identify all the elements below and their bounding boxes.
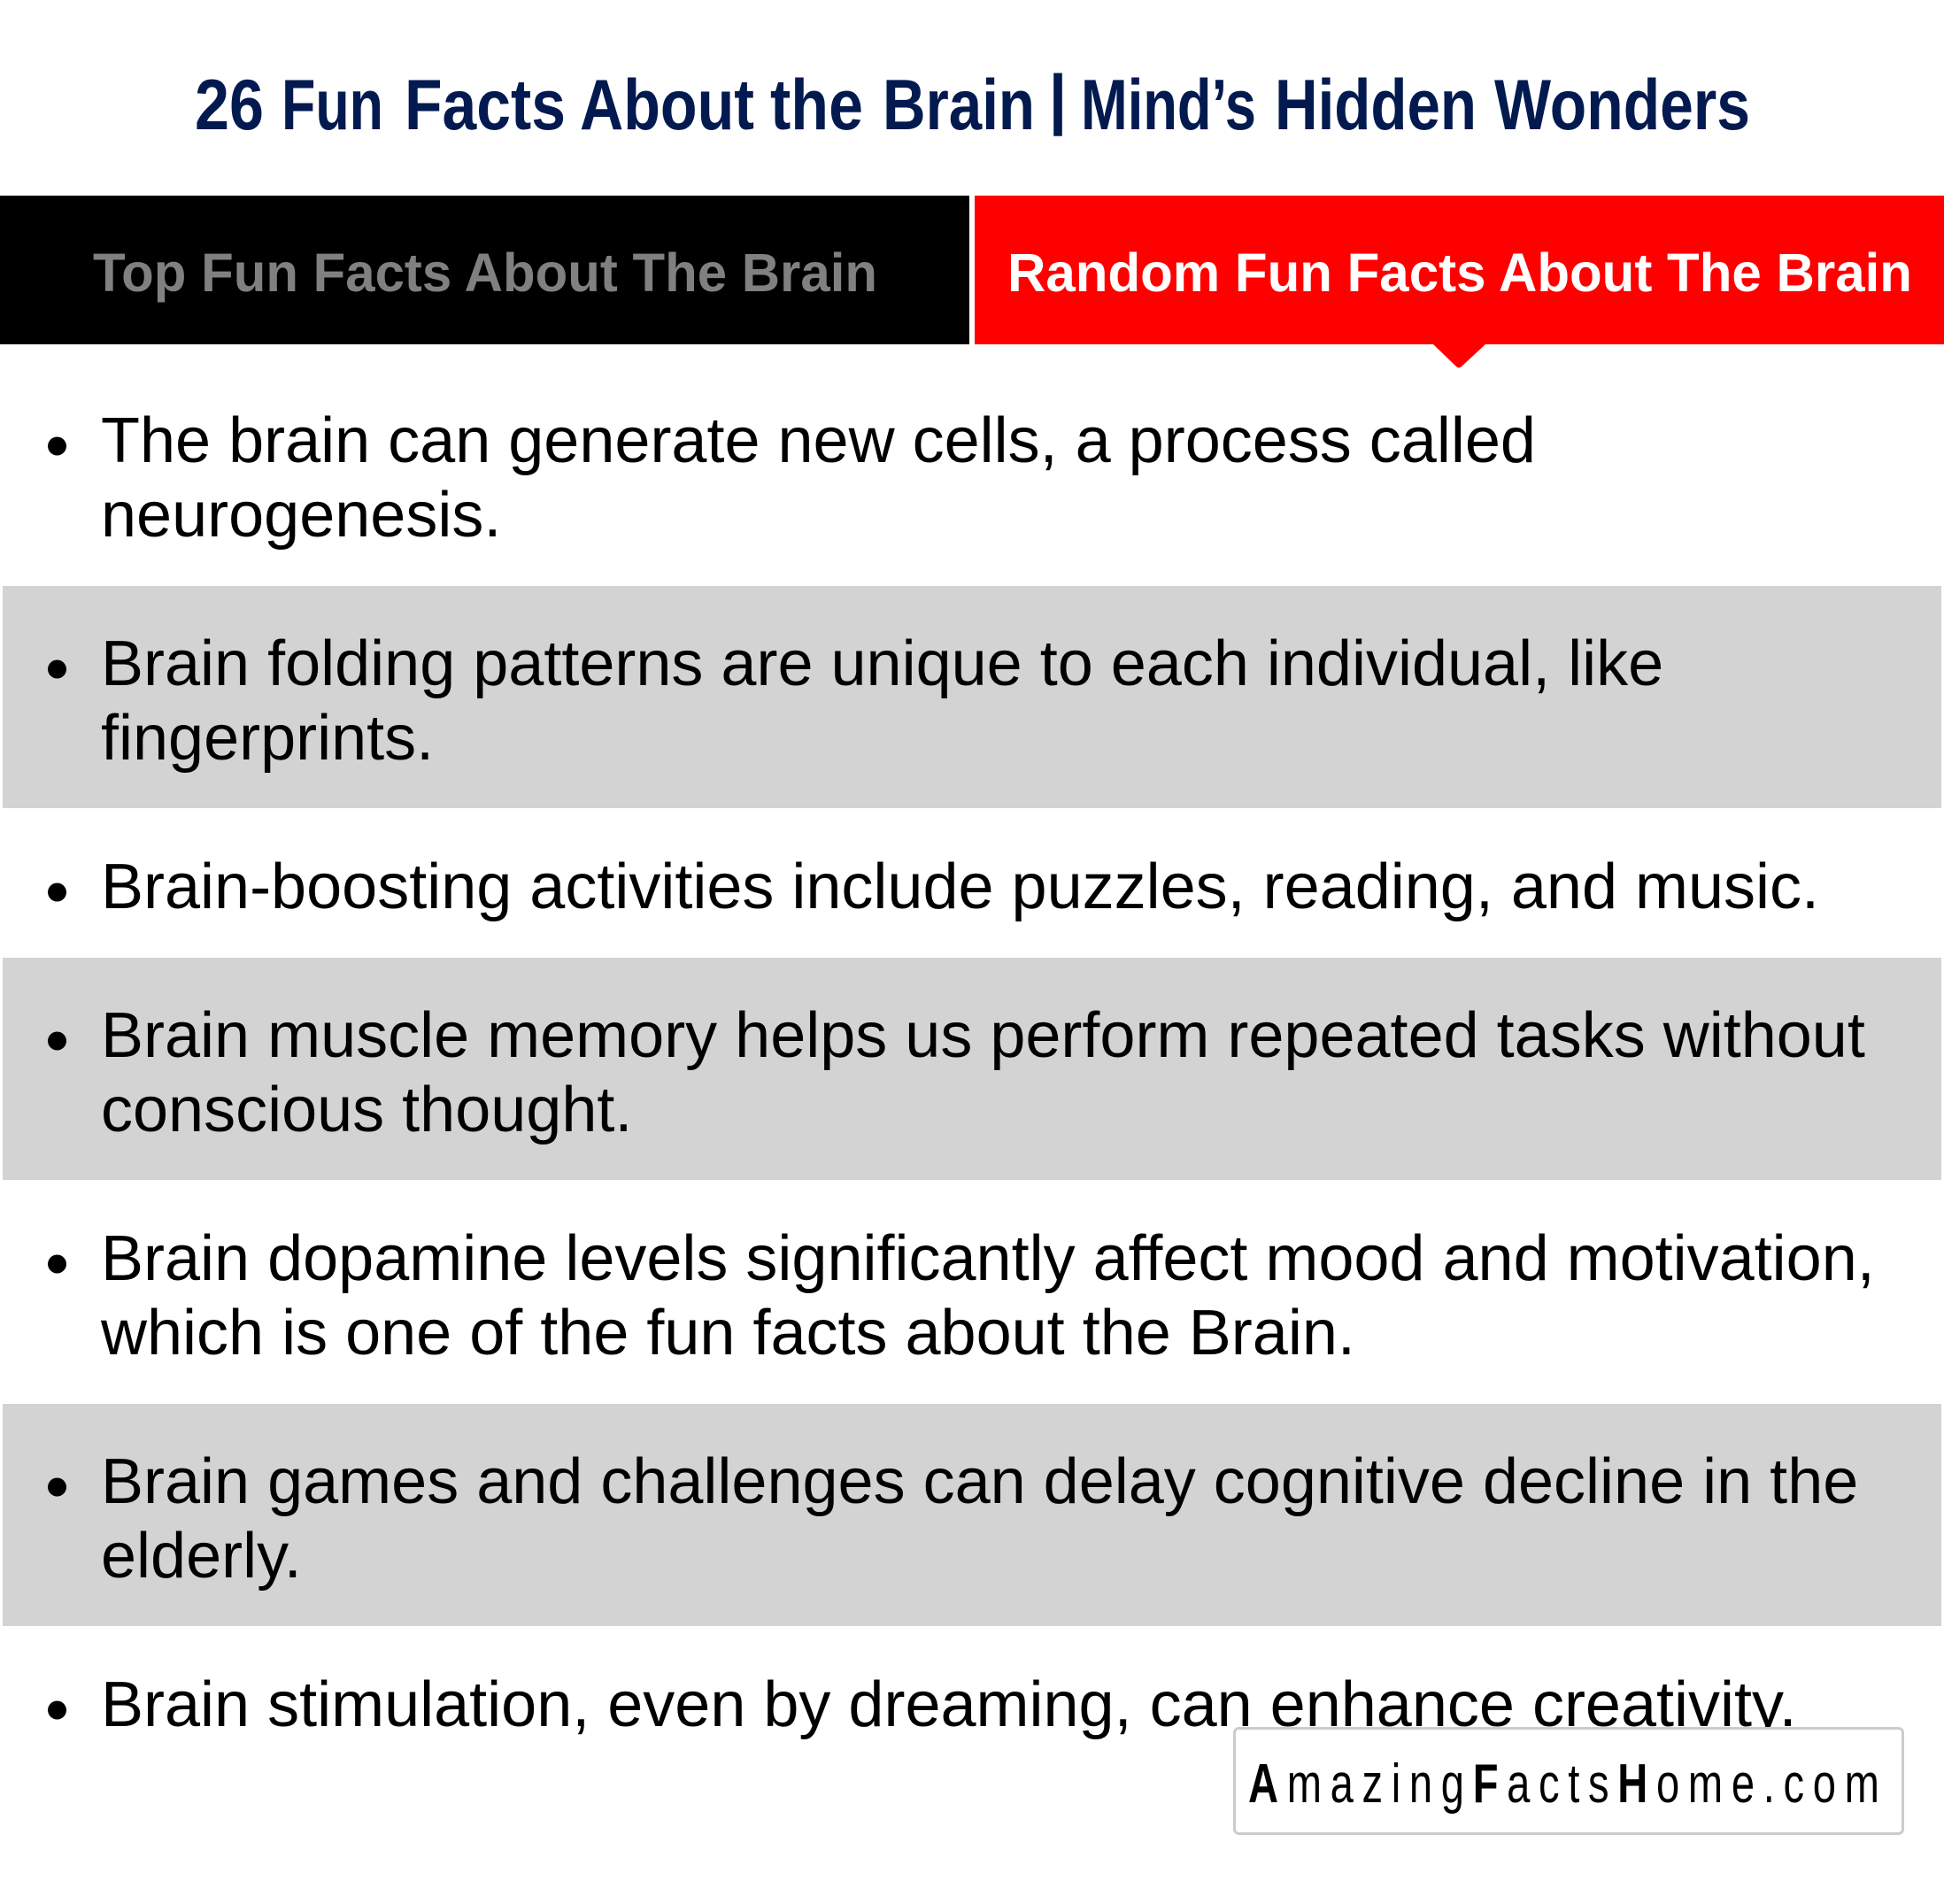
- bullet: [48, 437, 66, 455]
- fact row 5: [48, 1223, 1875, 1368]
- title: About: [580, 66, 754, 145]
- fact row 2: [3, 586, 1941, 808]
- tab label: random: Random Fun Facts About The Brain: [1007, 243, 1912, 303]
- title: Hidden: [1275, 66, 1477, 145]
- fact row 4: [3, 958, 1941, 1180]
- tab pointer: [1433, 344, 1485, 368]
- title: the: [770, 66, 863, 145]
- title: Mind’s: [1081, 66, 1256, 145]
- bullet: [48, 1032, 66, 1050]
- bullet: [48, 1478, 66, 1496]
- watermark text: AmazingFactsHome.com: [1248, 1753, 1879, 1815]
- title: |: [1048, 61, 1067, 136]
- fact row 3: [48, 852, 1819, 922]
- fact text: Brain stimulation, even by dreaming, can enhance creativity.: [101, 1669, 1797, 1740]
- fact row 7: [48, 1669, 1797, 1740]
- fact text: conscious thought.: [101, 1075, 632, 1145]
- title: Brain: [883, 66, 1035, 145]
- bullet: [48, 1255, 66, 1273]
- fact text: neurogenesis.: [101, 480, 501, 551]
- title: Facts: [405, 66, 566, 145]
- bullet: [48, 1701, 66, 1719]
- tab: top fun facts: [0, 196, 969, 344]
- title: [195, 61, 1750, 145]
- fact text: which is one of the fun facts about the Brain.: [100, 1298, 1355, 1368]
- bullet: [48, 660, 66, 678]
- fact text: Brain-boosting activities include puzzles, reading, and music.: [101, 852, 1819, 922]
- fact text: The brain can generate new cells, a process called: [101, 405, 1536, 476]
- fact text: elderly.: [101, 1521, 302, 1592]
- tab label: top: Top Fun Facts About The Brain: [93, 243, 877, 303]
- watermark box: [1234, 1728, 1903, 1834]
- fact text: fingerprints.: [101, 703, 434, 774]
- fact text: Brain folding patterns are unique to each individual, like: [101, 628, 1663, 699]
- title: Wonders: [1494, 66, 1750, 145]
- title: 26: [195, 66, 264, 145]
- bullet: [48, 883, 66, 901]
- tab: random fun facts: [975, 196, 1944, 368]
- fact row 1: [48, 405, 1536, 551]
- title: Fun: [282, 66, 383, 145]
- fact text: Brain games and challenges can delay cognitive decline in the: [101, 1446, 1858, 1517]
- fact row 6: [3, 1404, 1941, 1626]
- fact text: Brain muscle memory helps us perform repeated tasks without: [101, 1000, 1865, 1071]
- fact text: Brain dopamine levels significantly affect mood and motivation,: [101, 1223, 1875, 1294]
